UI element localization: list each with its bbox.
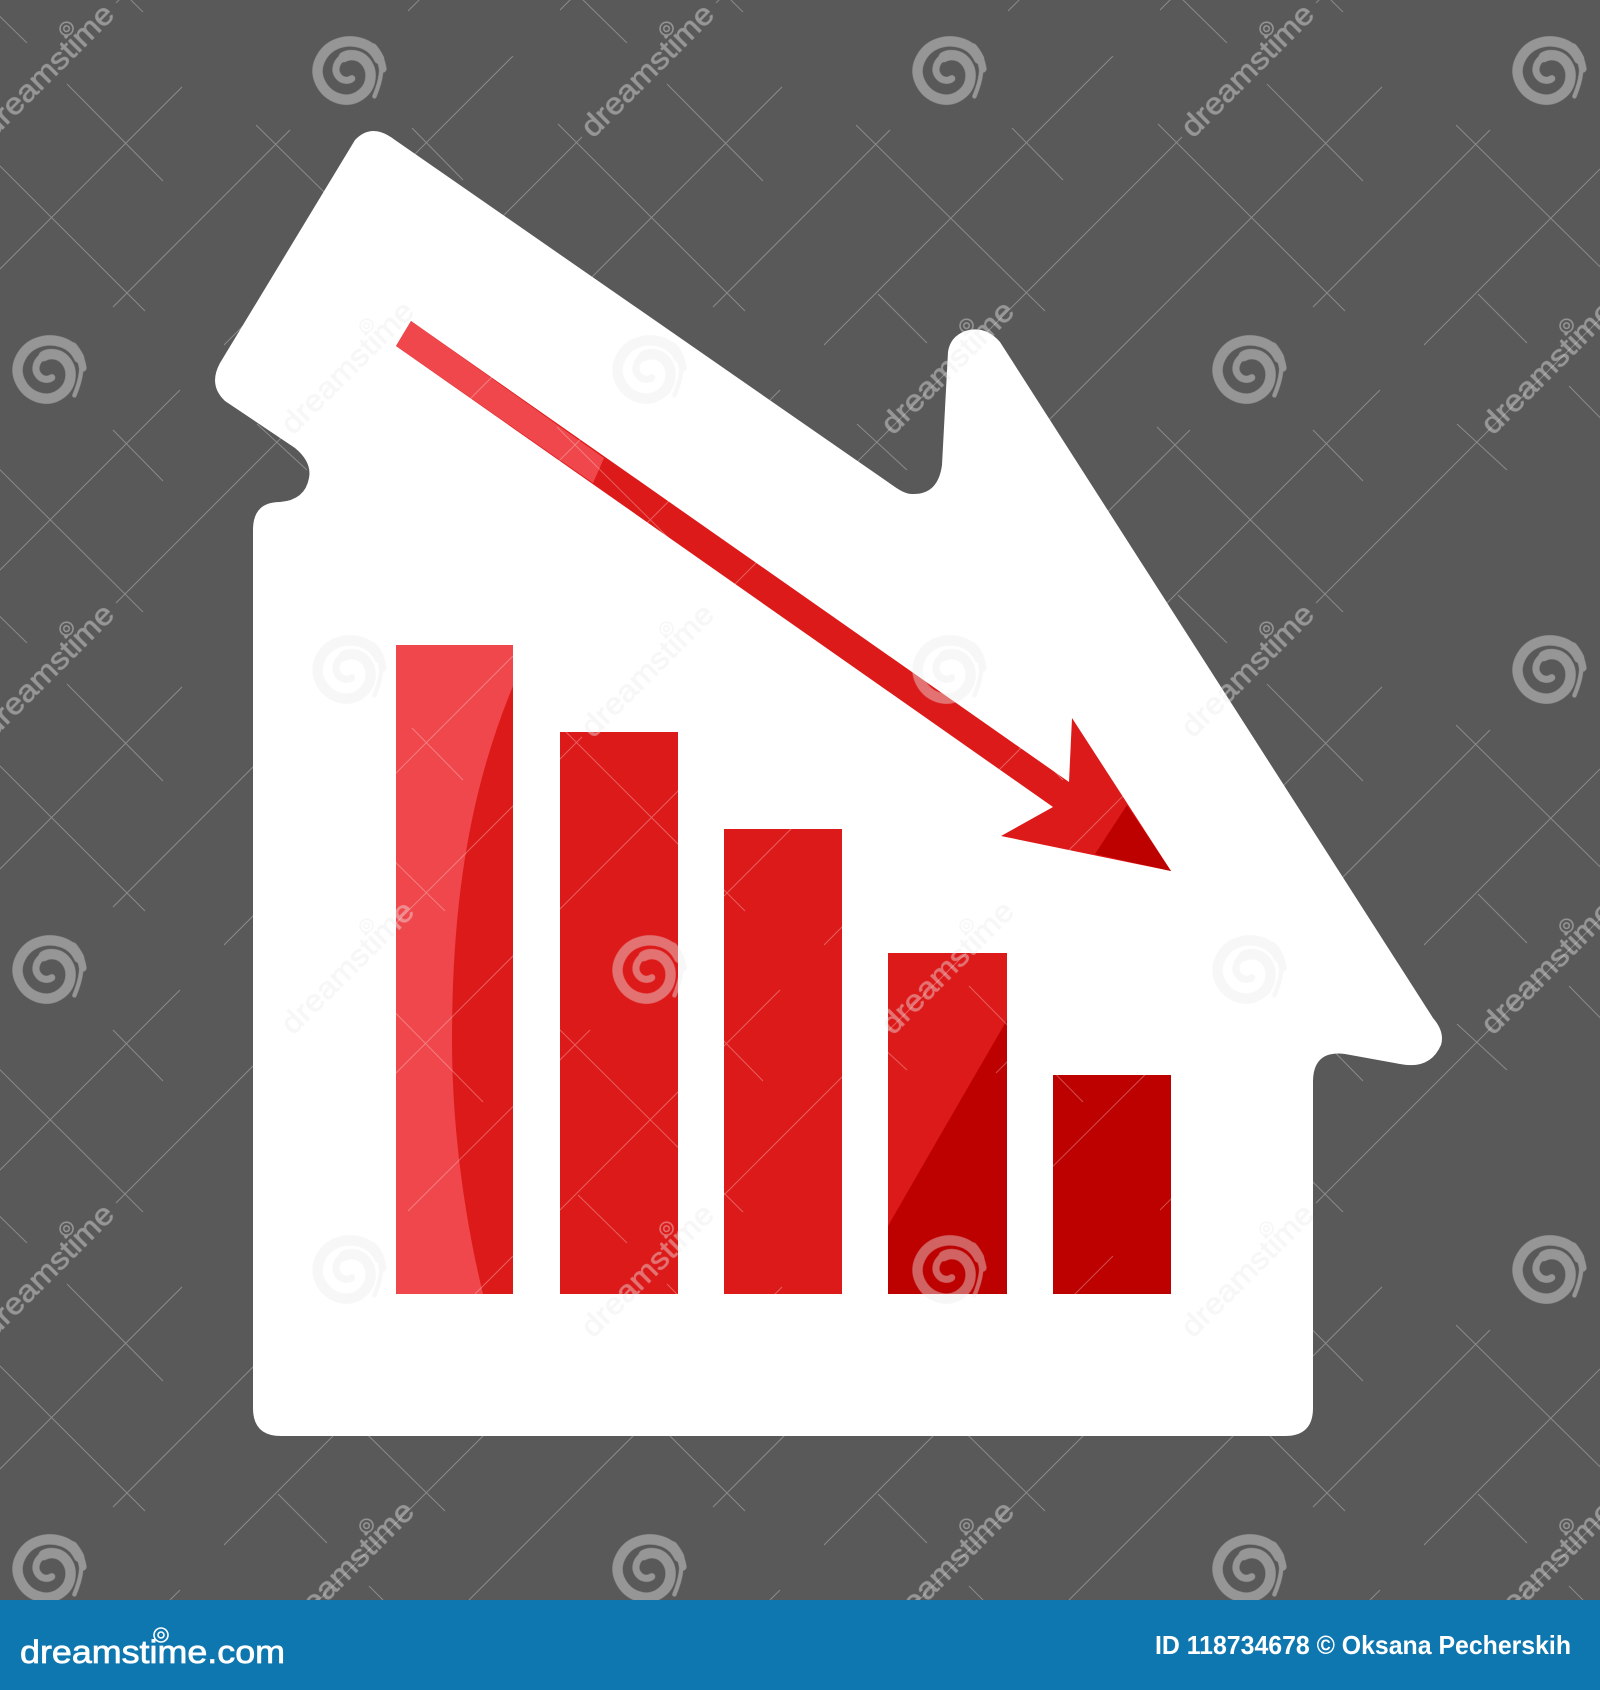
- watermark: diagonal dreamstime text: dreamstime: [873, 893, 1021, 1041]
- watermark: diagonal dreamstime text: dreamstime: [273, 893, 421, 1041]
- bar 4: [888, 953, 1007, 1294]
- watermark: diagonal dreamstime text: dreamstime: [1173, 0, 1321, 144]
- footer bar: [0, 1600, 1600, 1690]
- watermark: diagonal dreamstime text: dreamstime: [573, 596, 721, 744]
- watermark: diagonal dreamstime text: dreamstime: [1173, 596, 1321, 744]
- watermark: diagonal dreamstime text: dreamstime: [573, 0, 721, 144]
- bar chart: five declining bars: [396, 645, 1171, 1294]
- bar 5: [1053, 1075, 1171, 1294]
- bar 2: [560, 732, 678, 1294]
- arrow: downward trend: [396, 321, 1171, 871]
- watermark: diagonal dreamstime text: dreamstime: [1173, 1196, 1321, 1344]
- watermark: diagonal dreamstime text: dreamstime: [573, 1196, 721, 1344]
- bar 3: [724, 829, 842, 1294]
- footer image id and credit: ID 118734678 © Oksana Pecherskih: [1155, 1630, 1571, 1660]
- icon: house silhouette: [215, 131, 1442, 1436]
- watermark: diagonal dreamstime text: dreamstime: [273, 1493, 421, 1641]
- watermark: diagonal dreamstime text: dreamstime: [273, 293, 421, 441]
- watermark: diagonal dreamstime text: dreamstime: [873, 1493, 1021, 1641]
- footer logo text: dreamstime.com: [20, 1634, 285, 1670]
- bar 1: [396, 645, 513, 1294]
- watermark: diagonal dreamstime text: dreamstime: [873, 293, 1021, 441]
